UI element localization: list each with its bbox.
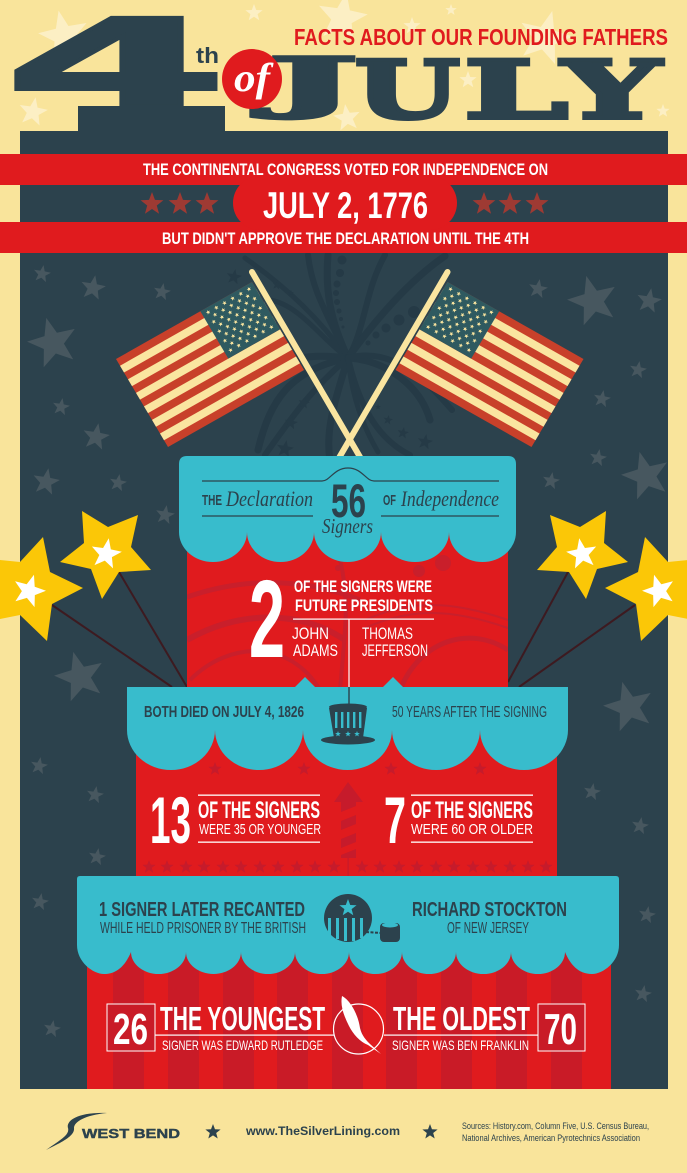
vertical stripes — [113, 950, 582, 1089]
awning: both died — [127, 677, 568, 770]
stat: 2 future presidents: FUTURE PRESIDENTS — [295, 597, 433, 615]
logo: West Bend: WEST BEND — [82, 1126, 180, 1141]
awning: recanted: OF NEW JERSEY — [447, 920, 529, 937]
awning: 56 signers: OF — [383, 492, 396, 509]
stat: 2 future presidents: THOMAS — [362, 624, 413, 643]
title JULY — [253, 43, 662, 138]
footer star right — [422, 1124, 438, 1138]
of badge — [222, 49, 282, 109]
awning: 56 signers: Independence — [400, 486, 499, 511]
youngest detail: SIGNER WAS EDWARD RUTLEDGE — [162, 1037, 323, 1053]
red firework swirl — [187, 555, 508, 690]
banner star rows — [141, 192, 548, 214]
website: www.TheSilverLining.com — [245, 1124, 400, 1138]
cake bottom red tier — [87, 950, 611, 1089]
awning: 56 signers — [179, 456, 516, 562]
badge 70 — [538, 1004, 585, 1051]
icon: rocket — [334, 782, 363, 878]
oldest heading: THE OLDEST — [393, 1000, 530, 1037]
icon: quill in circle — [334, 996, 384, 1054]
star row decorations — [142, 762, 553, 873]
banner line one: THE CONTINENTAL CONGRESS VOTED FOR INDEPENDENCE ON — [143, 161, 548, 179]
awning text: THE — [202, 492, 222, 509]
icon: ball and chain — [324, 894, 400, 942]
awning: 56 signers: Declaration — [225, 486, 313, 511]
right sparkler stars — [537, 511, 687, 641]
title JULY: Y — [561, 43, 662, 137]
stat: 7 signers: WERE 60 OR OLDER — [411, 821, 533, 838]
faint header stars — [17, 0, 670, 131]
title JULY: U — [355, 43, 460, 138]
right flag — [340, 272, 584, 457]
number 70: 70 — [544, 1005, 577, 1054]
stat: 2 future presidents — [249, 558, 434, 687]
stat: 13 signers: WERE 35 OR YOUNGER — [199, 821, 321, 838]
stat: 2 future presidents: 2 — [249, 558, 285, 681]
badge 26 — [107, 1004, 155, 1051]
banner stripes — [0, 154, 687, 253]
cake middle red tier — [136, 725, 557, 880]
footer — [46, 1113, 649, 1150]
stockton text: RICHARD STOCKTON — [412, 899, 567, 921]
recanted text: 1 SIGNER LATER RECANTED — [99, 899, 305, 921]
youngest heading: THE YOUNGEST — [160, 1000, 325, 1037]
firework dots and dark stars — [225, 256, 434, 458]
stat: 7 signers — [384, 783, 533, 857]
title JULY: L — [464, 43, 568, 138]
cake top red tier — [187, 525, 508, 690]
awning: recanted — [77, 876, 619, 974]
stat: 2 future presidents: OF THE SIGNERS WERE — [294, 578, 432, 596]
banner date: JULY 2, 1776 — [263, 185, 428, 226]
both died text: BOTH DIED ON JULY 4, 1826 — [144, 704, 304, 721]
gold star sparklers — [0, 511, 687, 687]
number 26: 26 — [113, 1005, 148, 1054]
stat: oldest — [384, 1000, 585, 1054]
stat: 7 signers: OF THE SIGNERS — [411, 797, 533, 824]
left sparkler stars — [0, 511, 151, 641]
awning: recanted: WHILE HELD PRISONER BY THE BRITISH — [100, 920, 306, 937]
stat: 7 signers: 7 — [384, 783, 406, 857]
of badge: of — [234, 55, 274, 100]
stat: 13 signers: 13 — [150, 783, 191, 857]
oldest detail: SIGNER WAS BEN FRANKLIN — [392, 1037, 529, 1053]
logo: West Bend — [46, 1113, 180, 1150]
awning: 56 signers: 56 — [331, 474, 366, 527]
stat: 2 future presidents: JOHN — [292, 624, 329, 643]
stat: youngest — [107, 1000, 334, 1054]
title JULY: J — [253, 43, 358, 121]
banner line two: BUT DIDN'T APPROVE THE DECLARATION UNTIL THE 4TH — [162, 230, 529, 248]
icon: top hat — [321, 687, 375, 744]
fifty years text: 50 YEARS AFTER THE SIGNING — [392, 704, 547, 721]
stat: 13 signers: OF THE SIGNERS — [198, 797, 320, 824]
dark main panel — [20, 131, 668, 1089]
footer star left — [205, 1124, 221, 1138]
sources — [462, 1121, 649, 1144]
title: 4th of July — [3, 0, 662, 138]
banner: July 2, 1776 — [0, 154, 687, 253]
stat: 2 future presidents: JEFFERSON — [362, 641, 428, 660]
background stars — [22, 264, 674, 1038]
left flag — [116, 272, 360, 457]
fireworks burst — [235, 255, 452, 460]
sparkler sticks — [52, 572, 635, 687]
awning: 56 signers: Signers — [322, 514, 373, 538]
stat: 13 signers — [150, 783, 321, 857]
stat: 2 future presidents: ADAMS — [293, 641, 338, 660]
awning rules — [202, 468, 499, 516]
sources: National Archives, American Pyrotechnics Association — [462, 1133, 640, 1144]
title th: th — [196, 43, 219, 68]
